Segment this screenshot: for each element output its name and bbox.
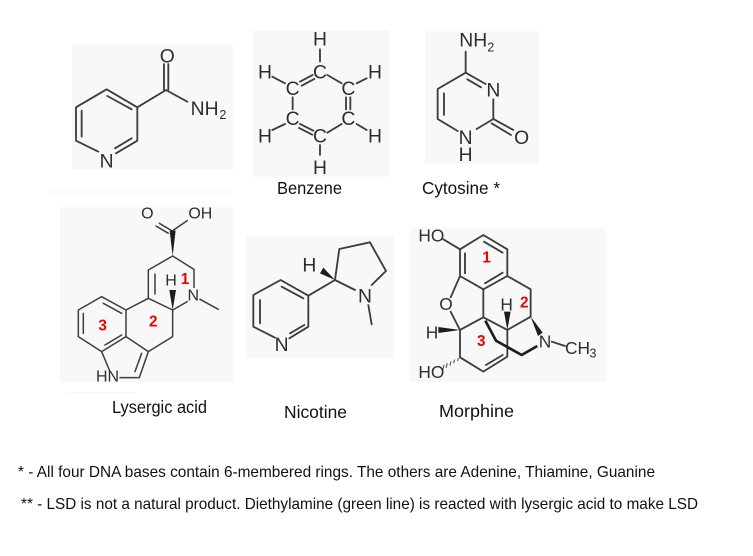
panel: cytosine molecule	[425, 31, 539, 166]
panel: nicotine molecule: N	[358, 286, 372, 307]
panel: cytosine molecule: H	[459, 145, 473, 166]
panel: cytosine molecule: N	[459, 128, 473, 149]
panel: benzene molecule: H	[368, 62, 382, 83]
footnote: DNA bases: * - All four DNA bases contain 6-membered rings. The others are Adenine, Thiamine, Guanine	[18, 464, 655, 481]
panel: benzene molecule: H	[313, 158, 327, 179]
panel: benzene molecule: C	[286, 109, 300, 130]
panel: nicotinamide molecule: N	[100, 152, 114, 173]
panel: lysergic acid molecule: 2	[149, 314, 158, 331]
panel: morphine molecule: 3	[589, 346, 596, 360]
panel: morphine molecule: N	[539, 332, 551, 352]
panel: benzene molecule: C	[313, 127, 327, 148]
panel: cytosine molecule: N	[486, 81, 500, 102]
panel: morphine molecule	[410, 226, 606, 382]
panel: morphine molecule: CH	[565, 338, 590, 358]
panel: cytosine molecule: NH	[459, 31, 487, 52]
panel: benzene molecule: C	[341, 109, 355, 130]
panel: nicotine molecule: N	[275, 335, 289, 356]
panel: morphine molecule: H	[500, 295, 513, 315]
panel: lysergic acid molecule	[60, 206, 233, 385]
panel: nicotinamide molecule: O	[160, 46, 175, 67]
panel: benzene molecule	[253, 29, 389, 179]
panel: lysergic acid molecule: 1	[181, 271, 190, 288]
panel: lysergic acid molecule: O	[141, 206, 154, 223]
caption: morphine: Morphine	[439, 401, 514, 421]
panel: benzene molecule: H	[368, 127, 382, 148]
panel: morphine molecule: 3	[477, 333, 486, 350]
panel: nicotinamide molecule: 2	[219, 108, 226, 122]
caption: nicotine: Nicotine	[284, 402, 347, 422]
panel: morphine molecule: O	[439, 294, 453, 314]
panel: nicotinamide molecule	[72, 45, 233, 173]
panel: lysergic acid molecule: OH	[188, 206, 212, 223]
panel: nicotine molecule: H	[302, 256, 316, 277]
panel: morphine molecule: HO	[418, 362, 444, 382]
panel: morphine molecule: 2	[520, 295, 529, 312]
panel: nicotine molecule	[246, 236, 394, 358]
panel: benzene molecule: H	[258, 62, 272, 83]
panel: morphine molecule: 1	[482, 250, 491, 267]
caption: cytosine: Cytosine *	[422, 178, 500, 198]
caption: lysergic acid: Lysergic acid	[112, 397, 207, 417]
footnote: LSD: ** - LSD is not a natural product. Diethylamine (green line) is reacted with lysergic acid to make LSD	[21, 496, 698, 513]
panel: benzene molecule: C	[286, 79, 300, 100]
panel: benzene molecule: C	[313, 62, 327, 83]
panel: cytosine molecule: 2	[487, 41, 494, 55]
panel: morphine molecule: HO	[418, 226, 444, 246]
panel: benzene molecule: H	[258, 127, 272, 148]
panel: lysergic acid molecule: 3	[98, 318, 107, 335]
panel: cytosine molecule: O	[514, 128, 529, 149]
caption: benzene: Benzene	[277, 178, 342, 198]
panel: lysergic acid molecule: H	[165, 272, 177, 289]
panel: nicotinamide molecule: NH	[191, 99, 219, 120]
panel: lysergic acid molecule: HN	[96, 368, 119, 385]
panel: benzene molecule: H	[313, 29, 327, 50]
panel: lysergic acid molecule: N	[188, 287, 199, 304]
panel: benzene molecule: C	[341, 79, 355, 100]
panel: morphine molecule: H	[426, 322, 438, 342]
